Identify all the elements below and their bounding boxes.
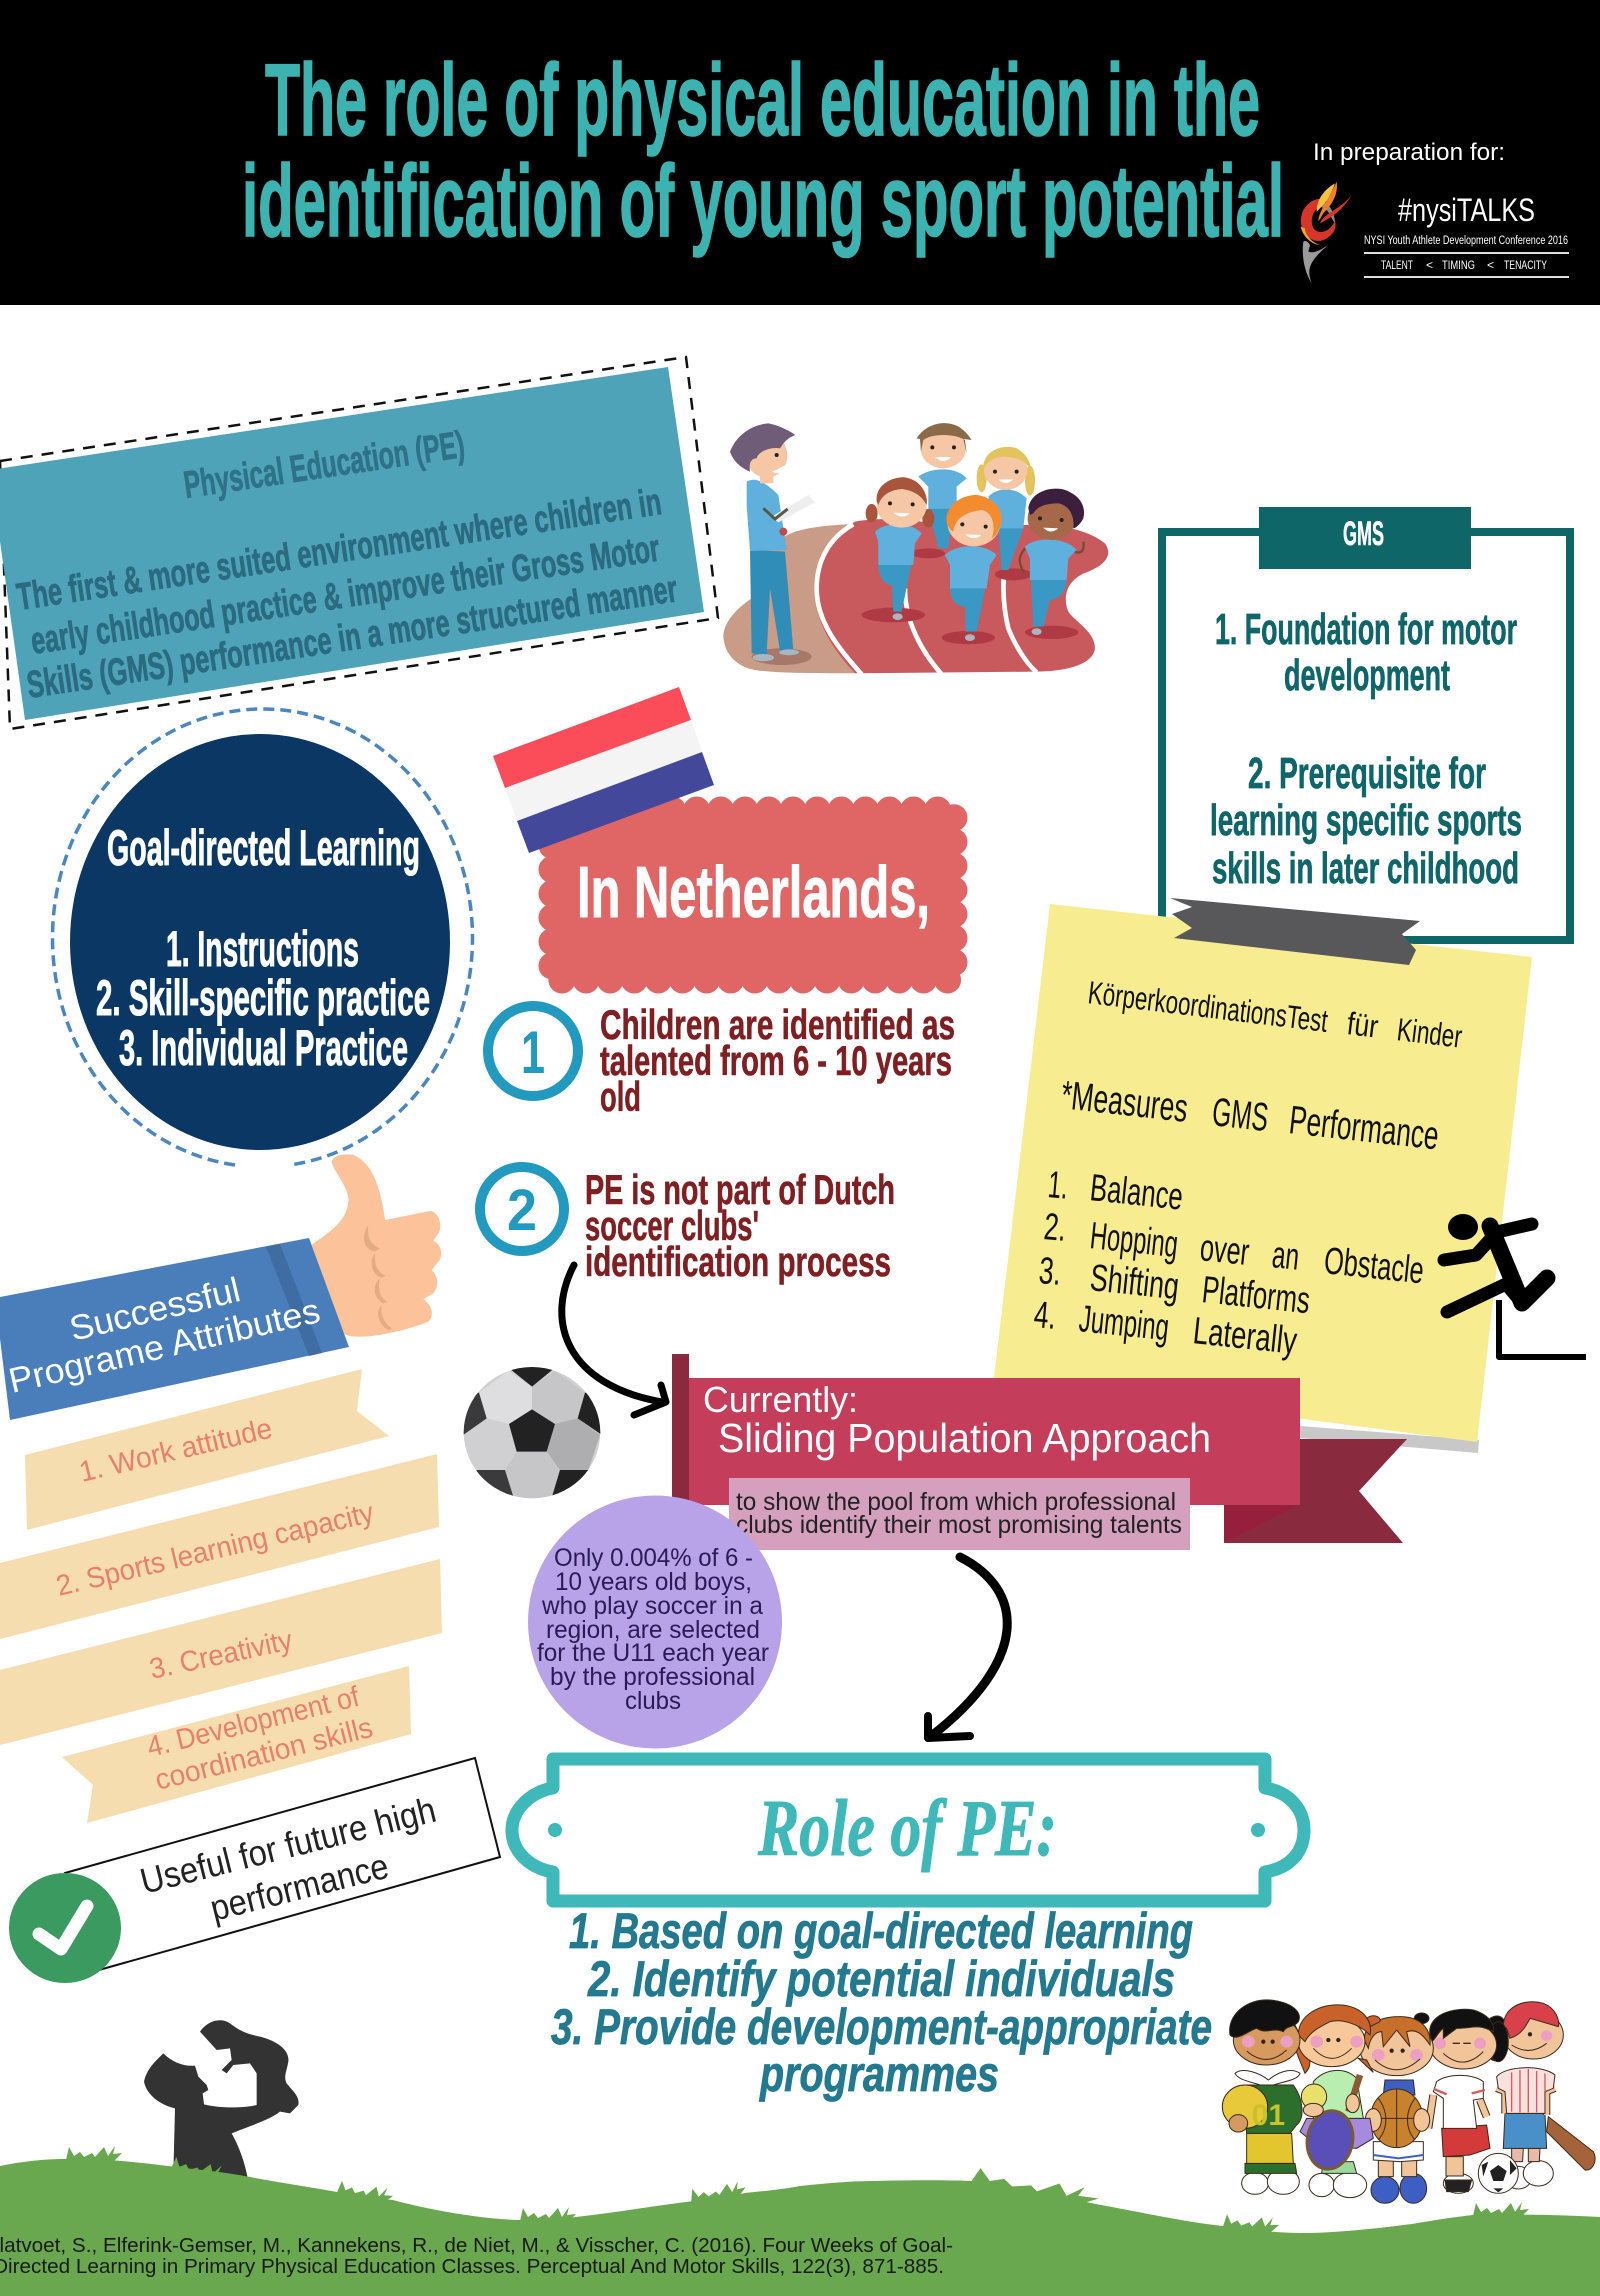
note list: an <box>1270 1234 1301 1279</box>
goal-directed learning text: 3. Individual Practice <box>119 1020 408 1076</box>
child: back left <box>917 423 972 548</box>
child: soccer <box>1414 2009 1508 2193</box>
ribbon 3: 3. Creativity <box>147 1624 296 1686</box>
banner: currently sliding population approach <box>672 1354 1407 1550</box>
illustration: teacher and children on a running track <box>723 423 1108 674</box>
definition text: Skills (GMS) performance in a more structured manner <box>24 568 680 707</box>
conference branding: TENACITY <box>1504 258 1547 272</box>
circle: selection statistic: by the professional <box>550 1663 755 1691</box>
child: back right <box>977 447 1035 570</box>
soccer ball <box>1478 2153 1518 2193</box>
callout: in Netherlands: In Netherlands, <box>577 853 930 933</box>
conference branding: TALENT <box>1381 258 1413 272</box>
conference branding: #nysiTALKS <box>1398 192 1535 228</box>
point 2 text <box>585 1166 895 1285</box>
child: football <box>1222 2000 1302 2194</box>
callout: useful for future high performance: performance <box>206 1845 393 1929</box>
ribbon 4 <box>62 1666 411 1823</box>
citation: Platvoet, S., Elferink-Gemser, M., Kannekens, R., de Niet, M., & Visscher, C. (2016). Four Weeks of Goal- <box>0 2234 953 2257</box>
child: tennis <box>1291 2005 1380 2198</box>
header banner <box>0 0 1600 305</box>
list: role of PE: programmes <box>758 2046 999 2102</box>
definition text <box>14 481 680 707</box>
conference branding <box>1364 192 1569 278</box>
note list: 3. <box>1037 1250 1063 1294</box>
note list: Balance <box>1088 1167 1185 1219</box>
point 1 text: Children are identified as <box>600 1001 955 1048</box>
point 2 text: identification process <box>585 1238 891 1285</box>
frame: role of PE <box>512 1759 1304 1901</box>
icon: conference logo flame <box>1301 182 1352 283</box>
circle: selection statistic: 10 years old boys, <box>555 1568 752 1596</box>
note list: Shifting <box>1088 1257 1181 1308</box>
circle: goal-directed learning <box>53 709 472 1165</box>
note list: 4. <box>1032 1294 1058 1338</box>
note title: KörperkoordinationsTest <box>1086 974 1330 1039</box>
ribbon 1: 1. Work attitude <box>76 1413 275 1489</box>
goal-directed learning text: 2. Skill-specific practice <box>96 970 430 1026</box>
illustration: five children with sports equipment <box>1222 2000 1595 2203</box>
GMS list <box>1210 605 1522 893</box>
citation: Directed Learning in Primary Physical Education Classes. Perceptual And Motor Skills, 122(3), 871-885. <box>0 2255 944 2278</box>
point 1 text: talented from 6 - 10 years <box>600 1037 952 1084</box>
grass hill <box>0 2146 1600 2296</box>
child: football: 01 <box>1252 2099 1285 2132</box>
note subtitle: Performance <box>1287 1098 1441 1158</box>
banner subtitle: to show the pool from which professional <box>736 1488 1176 1516</box>
tape <box>1170 898 1420 965</box>
icon: thumbs up hand <box>312 1154 441 1337</box>
goal-directed learning text: 1. Instructions <box>166 921 359 977</box>
silhouette: parent lifting child <box>144 2020 299 2182</box>
point 2 text: PE is not part of Dutch <box>585 1166 895 1213</box>
list: role of PE: 1. Based on goal-directed learning <box>569 1903 1193 1959</box>
panel: GMS: GMS <box>1343 515 1384 553</box>
child: right <box>1020 489 1084 635</box>
ribbon 4: coordination skills <box>152 1712 376 1797</box>
banner heading: Sliding Population Approach <box>718 1415 1211 1461</box>
child: front left <box>866 477 934 620</box>
panel: physical education definition <box>0 357 718 729</box>
GMS list: development <box>1284 651 1450 700</box>
icon: number 1: 1 <box>521 1019 545 1086</box>
teacher <box>730 423 815 661</box>
list: role of PE: 3. Provide development-appropriate <box>551 1999 1212 2055</box>
child: front centre <box>945 495 1002 641</box>
banner subtitle: clubs identify their most promising talents <box>736 1511 1182 1539</box>
sleeve banner: successful programme attributes <box>0 1238 349 1420</box>
callout: useful for future high performance: Useful for future high <box>136 1789 440 1902</box>
conference branding: < <box>1426 258 1433 272</box>
list: role of PE: 2. Identify potential individuals <box>587 1951 1175 2007</box>
conference branding: TIMING <box>1442 258 1475 272</box>
note title: Kinder <box>1395 1011 1464 1055</box>
goal-directed learning text <box>96 820 430 1076</box>
circle: selection statistic: who play soccer in a <box>541 1592 763 1620</box>
panel: GMS <box>1162 507 1570 940</box>
attribute ribbons <box>0 1369 442 1823</box>
note list: 1. <box>1046 1164 1070 1208</box>
note list <box>1032 1164 1426 1363</box>
ribbon 2: 2. Sports learning capacity <box>53 1497 377 1603</box>
circle: selection statistic: clubs <box>625 1687 681 1715</box>
point 2: dutch soccer clubs <box>480 1166 895 1285</box>
note subtitle: *Measures <box>1059 1073 1190 1131</box>
definition text: The first & more suited environment where children in <box>14 481 664 619</box>
note list: Obstacle <box>1322 1240 1426 1292</box>
circle: selection statistic: Only 0.004% of 6 - <box>554 1544 753 1572</box>
note list: Jumping <box>1077 1298 1171 1349</box>
note subtitle <box>1059 1073 1441 1158</box>
child: baseball <box>1490 2002 1595 2189</box>
definition text: early childhood practice & improve their Gross Motor <box>28 527 662 663</box>
sleeve banner: successful programme attributes: Successful <box>66 1270 244 1349</box>
circle: selection statistic <box>528 1496 782 1748</box>
conference branding: < <box>1487 258 1494 272</box>
icon: dutch flag <box>493 687 714 853</box>
icon: check mark <box>9 1873 121 1983</box>
circle: selection statistic: region, are selected <box>546 1616 760 1644</box>
point 1: identification age <box>488 1001 955 1120</box>
banner heading: Currently: <box>703 1379 858 1420</box>
sleeve banner: successful programme attributes: Programe Attributes <box>5 1291 324 1401</box>
point 1 text: old <box>600 1073 641 1120</box>
banner subtitle <box>729 1478 1190 1550</box>
note subtitle: GMS <box>1210 1090 1271 1140</box>
goal-directed learning text: Goal-directed Learning <box>107 820 420 876</box>
point 2 text: soccer clubs' <box>585 1202 759 1249</box>
ribbon 2 <box>0 1454 439 1639</box>
icon: number 2: 2 <box>507 1178 537 1243</box>
list: role of PE <box>551 1903 1212 2102</box>
frame: role of PE: Role of PE: <box>757 1785 1057 1873</box>
title <box>242 43 1284 258</box>
icon: runner jumping a hurdle <box>1444 1214 1586 1357</box>
callout: useful for future high performance <box>9 1758 500 1983</box>
note list: over <box>1198 1227 1251 1274</box>
note list: Laterally <box>1191 1310 1299 1363</box>
icon: soccer ball <box>458 1365 605 1500</box>
note list: Hopping <box>1088 1215 1180 1266</box>
ribbon 3 <box>0 1559 442 1745</box>
icon: number 1 <box>488 1006 578 1096</box>
track <box>723 519 1108 674</box>
ribbon 1 <box>25 1369 389 1530</box>
ribbon 4: 4. Development of <box>144 1681 363 1764</box>
callout: in Netherlands <box>552 810 954 980</box>
citation <box>0 2234 953 2278</box>
arrow: to sliding population approach <box>562 1265 666 1415</box>
circle: selection statistic: for the U11 each year <box>537 1639 769 1667</box>
conference note: In preparation for: <box>1313 139 1505 166</box>
arrow: to role of PE <box>928 1557 1007 1738</box>
heading: physical education: Physical Education (PE) <box>181 424 467 507</box>
note list: Platforms <box>1200 1269 1312 1322</box>
note title: für <box>1345 1005 1381 1045</box>
icon: number 2 <box>480 1167 564 1251</box>
banner heading <box>703 1379 1211 1461</box>
sticky note: KTK test <box>994 904 1532 1453</box>
point 1 text <box>600 1001 955 1120</box>
child: basketball <box>1360 2017 1433 2203</box>
note list: 2. <box>1042 1206 1068 1250</box>
